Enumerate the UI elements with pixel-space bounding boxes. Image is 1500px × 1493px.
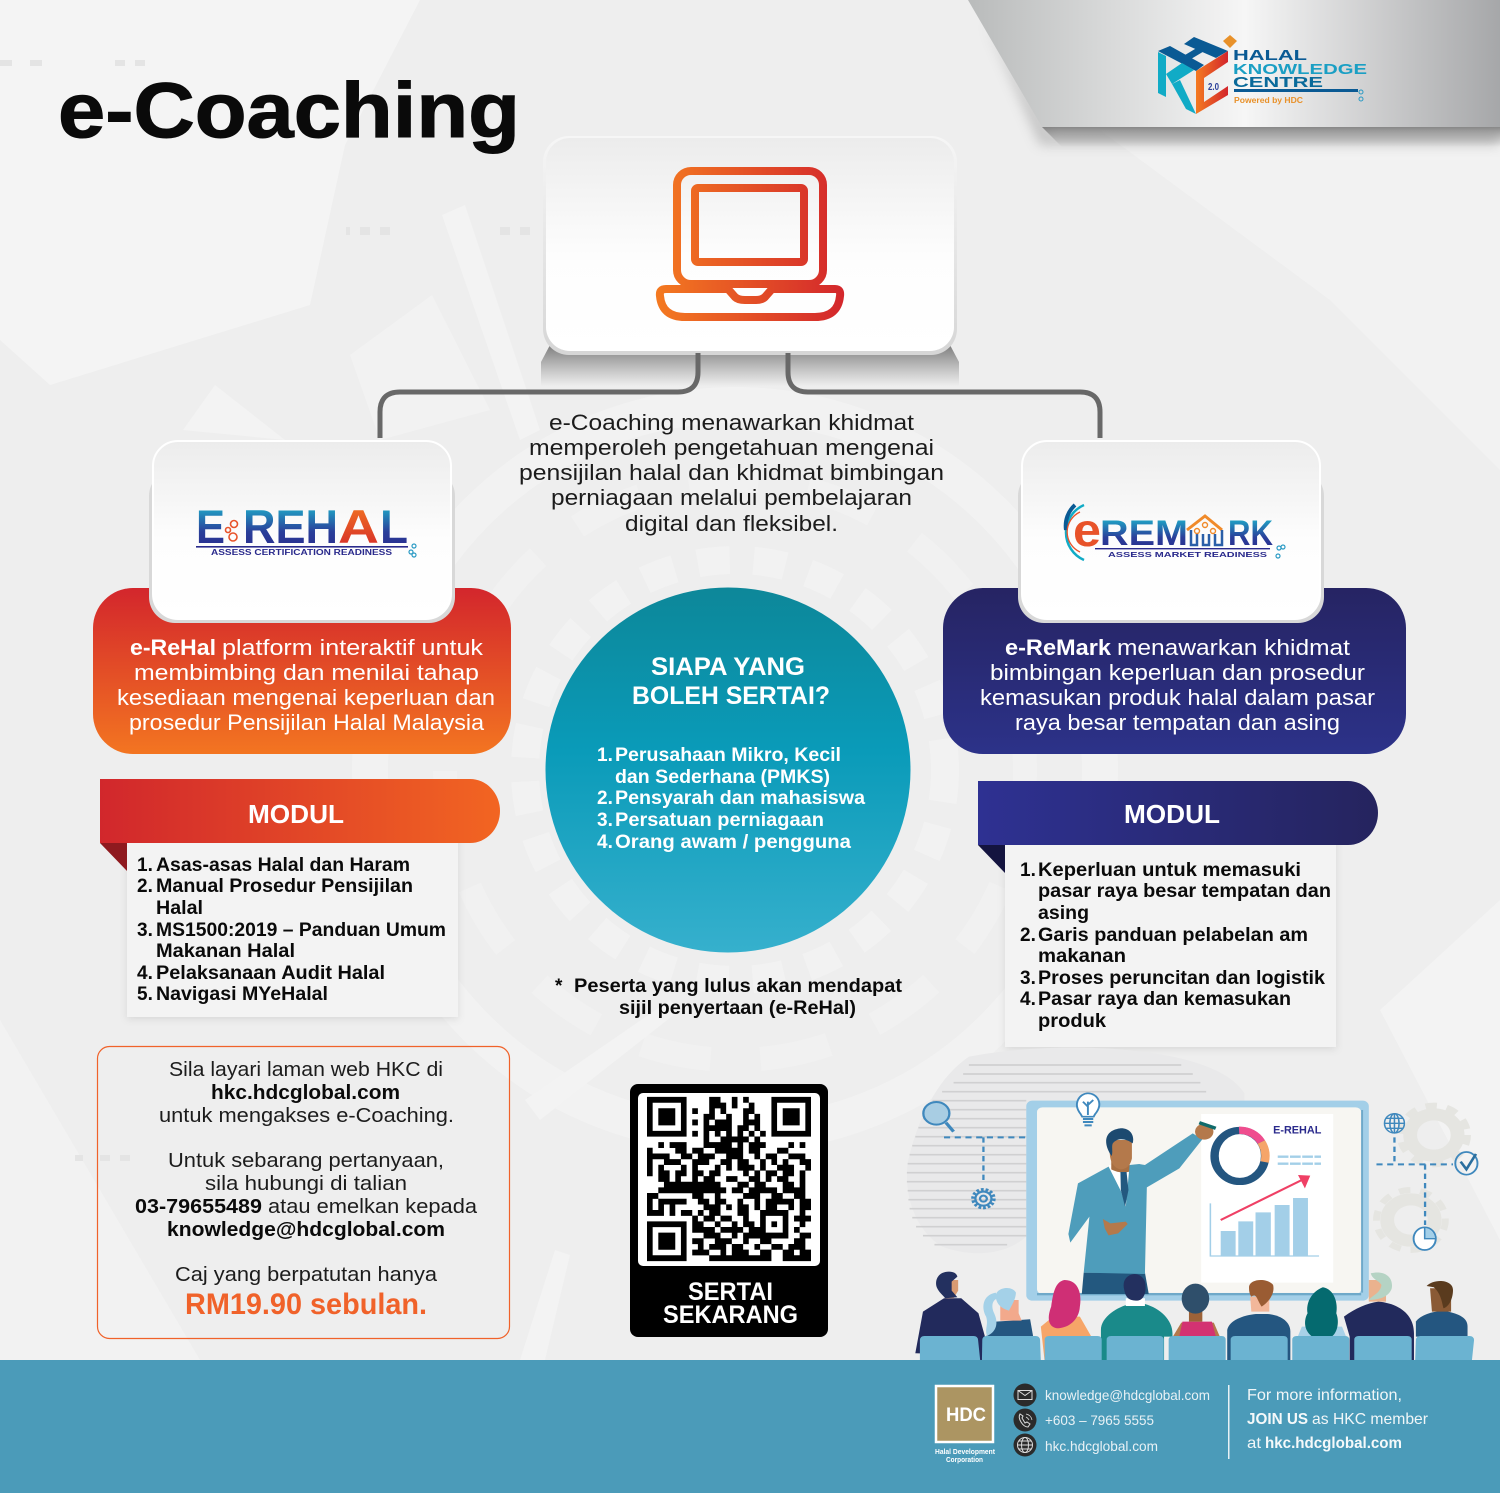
logo: e-ReMark: REM (1100, 514, 1188, 553)
bar chart (1210, 1198, 1319, 1256)
icon: web (1014, 1434, 1036, 1456)
icon: magnifier (923, 1102, 954, 1132)
arrow up (1221, 1175, 1310, 1220)
panel: e-ReMark description: menawarkan khidmat (1117, 635, 1350, 660)
legend dashes (1278, 1157, 1321, 1164)
panel: contact information: knowledge@hdcglobal.com (167, 1218, 445, 1241)
text block: intro (519, 410, 944, 536)
panel: contact information: hkc.hdcglobal.com (211, 1081, 400, 1104)
panel: MODUL list left (100, 779, 500, 1017)
list: participants: Orang awam / pengguna (615, 832, 851, 853)
list: e-ReHal modules (137, 855, 446, 1005)
logo: e-ReMark (1066, 504, 1285, 560)
panel: contact information: Caj yang berpatutan hanya (175, 1263, 438, 1286)
list: e-ReMark modules: produk (1038, 1011, 1106, 1032)
logo: HDC: Corporation (946, 1455, 983, 1464)
logo: Halal Knowledge Centre: KNOWLEDGE (1233, 61, 1367, 78)
heading: who can join: SIAPA YANG (651, 653, 805, 681)
list: e-ReMark modules: Garis panduan pelabelan am (1038, 925, 1308, 946)
panel: contact information: atau emelkan kepada (268, 1195, 478, 1218)
list: e-ReHal modules: Navigasi MYeHalal (156, 984, 328, 1005)
logo: e-ReHal: ASSESS CERTIFICATION READINESS (211, 548, 393, 557)
dashed links (944, 1137, 1453, 1225)
panel: e-ReMark description: bimbingan keperluan dan prosedur (990, 660, 1365, 685)
person 2 (983, 1288, 1033, 1337)
list: e-ReMark modules: 3. (1020, 968, 1036, 989)
panel: contact information: 03-79655489 (135, 1195, 262, 1218)
list: participants: 1. (597, 745, 613, 766)
logo: Halal Knowledge Centre: Powered by HDC (1234, 96, 1303, 105)
call to join: JOIN US (1247, 1411, 1308, 1428)
logo: e-ReMark: e (1073, 504, 1101, 556)
icon: globe (1384, 1114, 1404, 1133)
faint gears (1376, 1106, 1468, 1250)
chairs (920, 1336, 1474, 1362)
logo: e-ReMark: ASSESS MARKET READINESS (1108, 550, 1267, 559)
panel: e-ReHal description: prosedur Pensijilan Halal Malaysia (129, 710, 485, 735)
list: e-ReHal modules: 4. (137, 963, 153, 984)
panel: contact information: sila hubungi di talian (205, 1172, 407, 1195)
list: e-ReMark modules (1020, 860, 1331, 1032)
footer band (0, 1360, 1500, 1493)
list: participants: 2. (597, 788, 613, 809)
list: participants: 4. (597, 832, 613, 853)
list: e-ReMark modules: Keperluan untuk memasuki (1038, 860, 1301, 881)
list: participants: Pensyarah dan mahasiswa (615, 788, 865, 809)
call to join (1247, 1387, 1429, 1452)
logo: Halal Knowledge Centre: HALAL (1233, 47, 1307, 64)
icon: HKC cube: 2.0 (1208, 82, 1219, 93)
icon: laptop (660, 171, 840, 317)
panel: laptop card (541, 136, 959, 386)
heading: who can join: BOLEH SERTAI? (632, 682, 830, 710)
list: e-ReHal modules: 3. (137, 920, 153, 941)
person 1 (915, 1272, 985, 1361)
logo: e-ReHal: REH (243, 500, 338, 553)
logo: e-ReMark: RK (1228, 514, 1273, 553)
panel: e-ReHal description: kesediaan mengenai keperluan dan (117, 685, 495, 710)
list: participants: Persatuan perniagaan (615, 810, 824, 831)
person 4 (1101, 1274, 1172, 1362)
list: e-ReMark modules: 2. (1020, 925, 1036, 946)
list: e-ReHal modules: MS1500:2019 – Panduan Umum (156, 920, 446, 941)
note: certificate: Peserta yang lulus akan mendapat (574, 976, 903, 997)
list: e-ReMark modules: makanan (1038, 946, 1126, 967)
title: e-Coaching (58, 66, 520, 154)
mini logo: E-REHAL (1273, 1123, 1322, 1136)
list: e-ReMark modules: Pasar raya dan kemasukan (1038, 989, 1291, 1010)
person 8 (1344, 1272, 1414, 1362)
donut chart (1215, 1130, 1265, 1181)
text block: intro: pensijilan halal dan khidmat bimbingan (519, 460, 944, 485)
list: participants: Perusahaan Mikro, Kecil (615, 745, 841, 766)
presenter (1068, 1123, 1216, 1294)
panel: e-ReHal description: platform interaktif untuk (222, 635, 484, 660)
text block: intro: perniagaan melalui pembelajaran (551, 485, 912, 510)
panel: QR code (630, 1084, 828, 1337)
list: e-ReMark modules: 1. (1020, 860, 1036, 881)
price: RM19.90 sebulan. (185, 1288, 427, 1321)
panel: e-ReMark description: kemasukan produk halal dalam pasar (980, 685, 1375, 710)
list: participants: dan Sederhana (PMKS) (615, 767, 830, 788)
person 5 (1173, 1284, 1220, 1336)
panel: e-ReHal logo card (149, 441, 455, 623)
phone number: +603 – 7965 5555 (1045, 1412, 1154, 1428)
text block: intro: digital dan fleksibel. (625, 511, 838, 536)
list: e-ReMark modules: Proses peruncitan dan logistik (1038, 968, 1325, 989)
icon: email (1014, 1384, 1036, 1406)
call to join: hkc.hdcglobal.com (1265, 1435, 1402, 1452)
logo: Halal Knowledge Centre (1158, 35, 1367, 114)
website: hkc.hdcglobal.com (1045, 1438, 1158, 1454)
panel: e-ReMark description (943, 588, 1406, 754)
panel: contact information: Sila layari laman web HKC di (169, 1058, 443, 1081)
person 7 (1298, 1287, 1346, 1336)
logo: HDC (935, 1386, 995, 1464)
illustration: presenter and audience (907, 1048, 1477, 1362)
icon: light bulb (1077, 1093, 1099, 1125)
person 6 (1227, 1280, 1290, 1362)
heading: modul: MODUL (1124, 799, 1220, 829)
panel: e-ReHal description (93, 588, 511, 754)
panel: contact information (98, 1046, 510, 1338)
list: e-ReHal modules: Pelaksanaan Audit Halal (156, 963, 385, 984)
call to join: as HKC member (1312, 1411, 1429, 1428)
heading: modul: MODUL (248, 799, 344, 829)
list: e-ReMark modules: asing (1038, 903, 1089, 924)
list: e-ReHal modules: Halal (156, 898, 203, 919)
panel: e-ReMark logo card (1018, 441, 1324, 623)
silver header band (968, 0, 1500, 147)
QR pattern (647, 1100, 811, 1258)
text block: intro: e-Coaching menawarkan khidmat (549, 410, 914, 435)
call to action (663, 1278, 798, 1329)
list: e-ReHal modules: 5. (137, 984, 153, 1005)
call to join: at (1247, 1435, 1262, 1452)
icon: clock (1414, 1227, 1436, 1250)
icon: check (1455, 1152, 1477, 1175)
list: e-ReMark modules: 4. (1020, 989, 1036, 1010)
panel: MODUL list right (978, 781, 1378, 1047)
list: e-ReMark modules: pasar raya besar tempatan dan (1038, 881, 1331, 902)
panel: contact information: Untuk sebarang pertanyaan, (168, 1149, 444, 1172)
panel: e-ReMark description: e-ReMark (1005, 635, 1112, 660)
list: e-ReHal modules: 2. (137, 876, 153, 897)
panel: e-ReHal description: e-ReHal (130, 635, 216, 660)
blob with stripes (907, 1048, 1244, 1253)
list: e-ReHal modules: Manual Prosedur Pensijilan (156, 876, 413, 897)
panel: contact information: untuk mengakses e-Coaching. (159, 1104, 454, 1127)
logo: HDC: Halal Development (935, 1447, 995, 1456)
note: certificate (555, 976, 903, 1019)
list: participants: 3. (597, 810, 613, 831)
icon: HKC cube (1158, 35, 1237, 114)
logo: Halal Knowledge Centre: CENTRE (1233, 74, 1323, 91)
panel: e-ReMark description: raya besar tempatan dan asing (1015, 710, 1340, 735)
icon: gear (973, 1190, 994, 1208)
call to action: SERTAI (688, 1278, 773, 1306)
person 9 (1416, 1281, 1468, 1337)
text block: intro: memperoleh pengetahuan mengenai (529, 435, 934, 460)
connector lines (380, 353, 1100, 438)
logo: e-ReHal (196, 500, 416, 557)
call to action: SEKARANG (663, 1301, 798, 1329)
panel: e-ReHal description: membimbing dan menilai tahap (134, 660, 479, 685)
list: e-ReHal modules: 1. (137, 855, 153, 876)
list: e-ReHal modules: Makanan Halal (156, 941, 295, 962)
panel: who can join (546, 588, 910, 952)
heading: who can join (632, 653, 830, 710)
note: certificate: sijil penyertaan (e-ReHal) (619, 998, 856, 1019)
audience (915, 1272, 1474, 1362)
logo: e-ReHal: L (380, 500, 408, 553)
call to join: For more information, (1247, 1387, 1402, 1404)
note: certificate: * (555, 976, 563, 997)
email address: knowledge@hdcglobal.com (1045, 1387, 1210, 1403)
list: e-ReHal modules: Asas-asas Halal dan Haram (156, 855, 410, 876)
list: participants (597, 745, 865, 853)
logo: HDC: HDC (946, 1405, 986, 1426)
logo: e-ReHal: E (196, 500, 225, 553)
whiteboard (1026, 1101, 1369, 1301)
icon: phone (1014, 1408, 1036, 1432)
person 3 (1041, 1280, 1091, 1362)
logo: e-ReHal: A (338, 500, 379, 553)
